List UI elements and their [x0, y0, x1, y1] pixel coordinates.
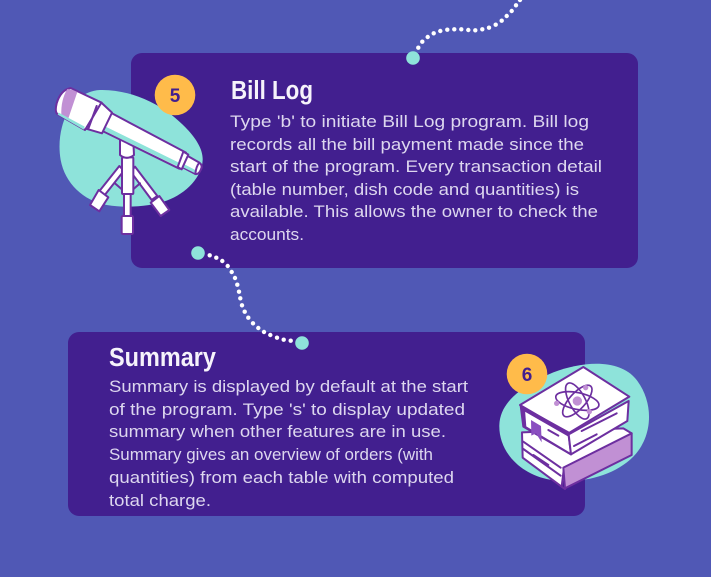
heading: bill log: Bill Log [231, 77, 313, 105]
telescope tube [56, 88, 202, 174]
text block: bill log description [230, 112, 602, 244]
heading: summary: Summary [109, 344, 217, 372]
teal blob behind telescope [60, 90, 203, 207]
text block: bill log description: accounts. [230, 225, 304, 244]
badge: number 6 [507, 354, 547, 394]
text block: bill log description: start of the program. Every transaction detail [230, 157, 602, 176]
text block: summary description: total charge. [109, 491, 211, 510]
text block: summary description: Summary is displayed by default at the start [109, 377, 468, 396]
icon: books [499, 364, 649, 489]
badge: number 5 [155, 75, 195, 115]
panel: bill log [131, 53, 638, 268]
upper book [520, 367, 629, 454]
lower book [522, 428, 632, 489]
connector: dotted path from bill log to summary [191, 246, 309, 350]
text block: summary description: summary when other features are in use. [109, 422, 446, 441]
connector: dotted path from top to bill log [406, 0, 522, 65]
tripod [90, 138, 169, 234]
text block: bill log description: Type 'b' to initiate Bill Log program. Bill log [230, 112, 589, 131]
badge: number 6: 6 [522, 365, 532, 386]
text block: bill log description: records all the bill payment made since the [230, 135, 584, 154]
text block: summary description: of the program. Type 's' to display updated [109, 400, 465, 419]
teal blob behind books [499, 364, 649, 481]
text block: summary description [109, 377, 468, 510]
badge: number 5: 5 [170, 86, 181, 107]
panel: summary [68, 332, 585, 516]
atom symbol [554, 380, 601, 422]
text block: bill log description: available. This allows the owner to check the [230, 202, 598, 221]
text block: summary description: quantities) from each table with computed [109, 468, 454, 487]
text block: summary description: Summary gives an overview of orders (with [109, 445, 433, 464]
icon: telescope [56, 88, 203, 234]
text block: bill log description: (table number, dish code and quantities) is [230, 180, 579, 199]
